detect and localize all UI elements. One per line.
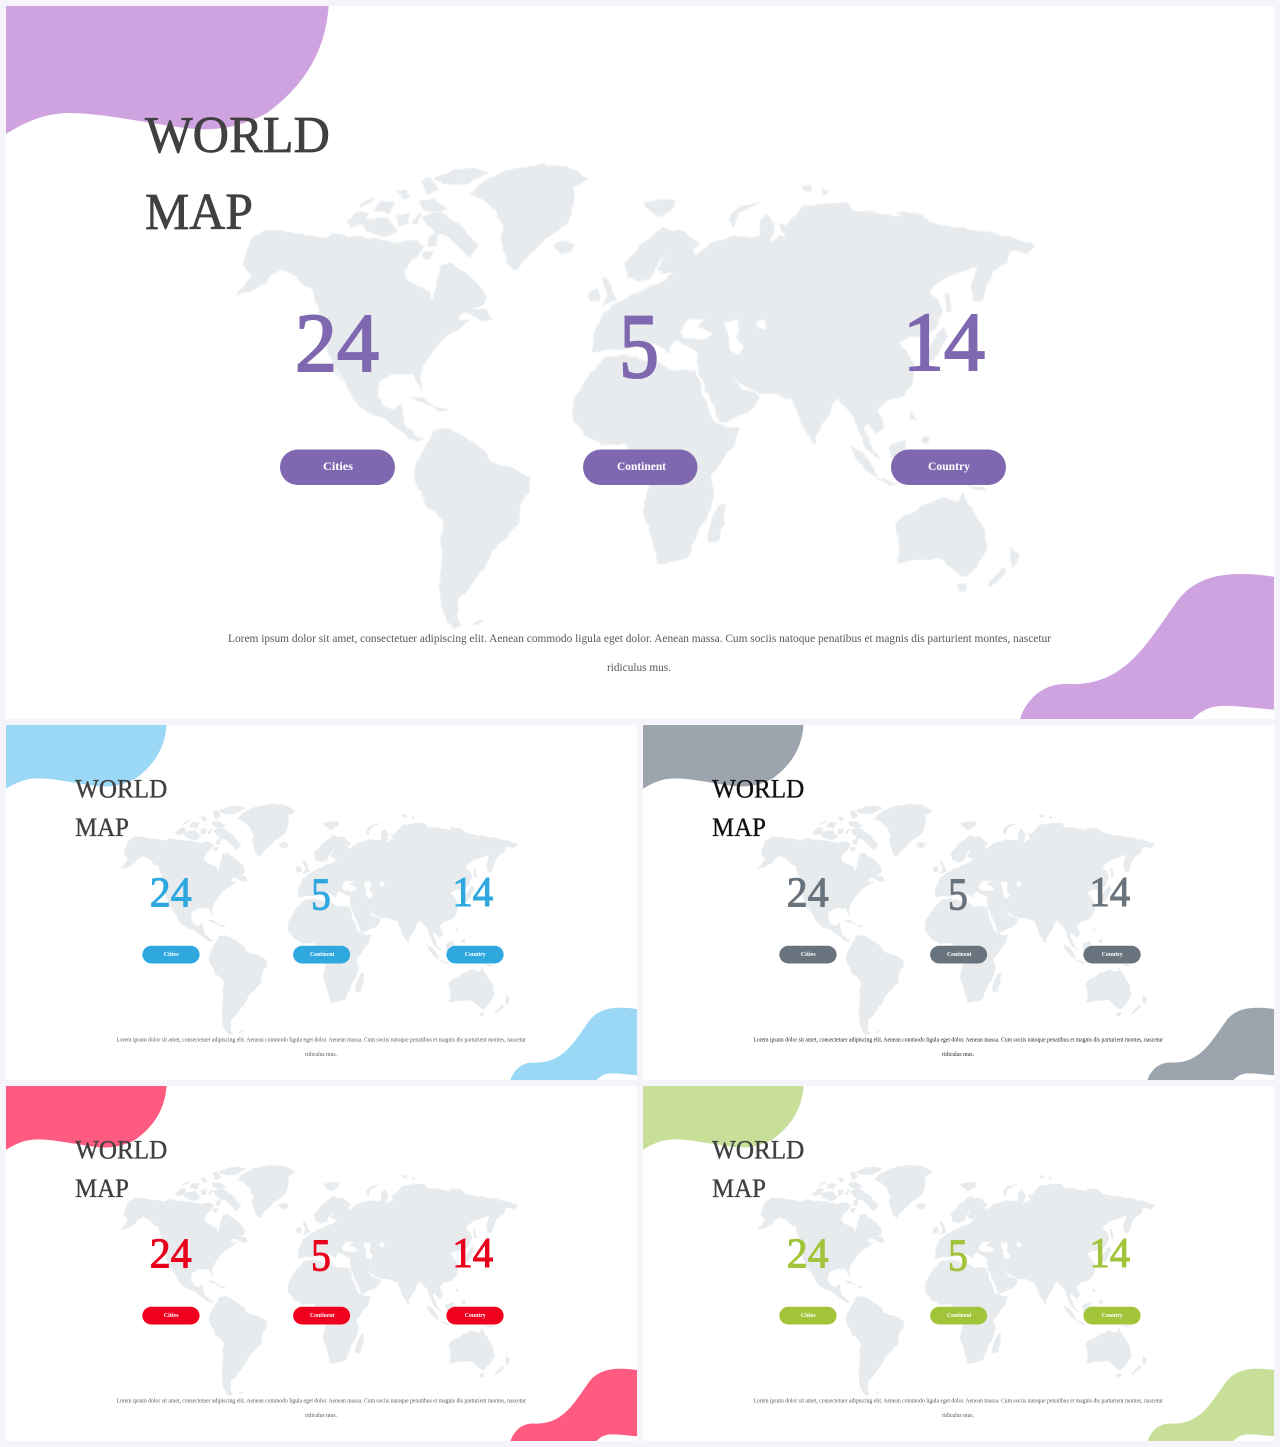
stat: 5 continent [583, 295, 698, 485]
stat: 5 continent: 5 [619, 295, 659, 397]
title: WORLD [145, 107, 330, 164]
world map [121, 1165, 518, 1397]
stat: 5 continent: 5 [311, 869, 331, 920]
title: MAP [712, 1174, 766, 1203]
stat: 24 cities: 24 [150, 871, 192, 917]
body text [228, 633, 1051, 674]
world map [121, 804, 518, 1036]
stat: 5 continent [293, 869, 350, 963]
stat: 24 cities: Cities [323, 459, 353, 473]
stat: 24 cities: Cities [164, 1313, 179, 1319]
title: MAP [75, 1174, 129, 1203]
stat: 24 cities: 24 [295, 297, 379, 390]
blob: top left [3, 1083, 167, 1152]
title [75, 1136, 167, 1203]
blob: top left [640, 1083, 804, 1152]
body text [116, 1399, 526, 1419]
stat: 5 continent: 5 [311, 1230, 331, 1281]
body text: Lorem ipsum dolor sit amet, consectetuer adipiscing elit. Aenean commodo ligula eget dolor. Aenean massa. Cum sociis natoque penatibus et magnis dis parturient montes, nascetur [116, 1038, 526, 1044]
title [75, 775, 167, 842]
stat: 24 cities [280, 297, 395, 485]
panel: blue world map slide [6, 725, 637, 1080]
blob: top left [0, 0, 329, 138]
stat: 5 continent: Continent [947, 1313, 971, 1319]
body text [116, 1038, 526, 1058]
title: WORLD [75, 775, 167, 804]
stat: 14 country [1083, 1231, 1141, 1324]
title: MAP [75, 813, 129, 842]
stat: 5 continent [930, 1230, 987, 1324]
stat: 14 country [446, 870, 504, 963]
blob: bottom right [1147, 1369, 1277, 1444]
body text: ridiculus mus. [607, 662, 671, 674]
title: WORLD [712, 1136, 804, 1165]
stat: 14 country [891, 296, 1006, 485]
stat: 24 cities: 24 [787, 871, 829, 917]
panel: purple world map slide [6, 6, 1274, 719]
body text: Lorem ipsum dolor sit amet, consectetuer adipiscing elit. Aenean commodo ligula eget dolor. Aenean massa. Cum sociis natoque penatibus et magnis dis parturient montes, nascetur [753, 1038, 1163, 1044]
stat: 5 continent: Continent [310, 1313, 334, 1319]
title [712, 1136, 804, 1203]
blob: bottom right [1018, 574, 1280, 725]
stat: 14 country: Country [928, 459, 970, 473]
stat: 14 country: Country [465, 952, 486, 958]
world map [758, 804, 1155, 1036]
stat: 14 country: 14 [452, 870, 493, 916]
stat: 14 country: 14 [452, 1231, 493, 1277]
stat: 24 cities: Cities [164, 952, 179, 958]
title [145, 107, 330, 241]
body text: ridiculus mus. [942, 1052, 974, 1058]
panel: grey world map slide [643, 725, 1274, 1080]
stat: 24 cities: Cities [801, 952, 816, 958]
stat: 5 continent: Continent [310, 952, 334, 958]
blob: top left [640, 722, 804, 791]
body text: ridiculus mus. [942, 1413, 974, 1419]
stat: 14 country [446, 1231, 504, 1324]
stat: 14 country [1083, 870, 1141, 963]
title: WORLD [75, 1136, 167, 1165]
body text: ridiculus mus. [305, 1413, 337, 1419]
blob: bottom right [1147, 1008, 1277, 1083]
stat: 14 country: 14 [903, 296, 985, 389]
stat: 14 country: 14 [1089, 1231, 1130, 1277]
blob: bottom right [510, 1369, 640, 1444]
world map [237, 165, 1035, 630]
title: MAP [712, 813, 766, 842]
title: WORLD [712, 775, 804, 804]
body text [753, 1399, 1163, 1419]
stat: 14 country: Country [1102, 952, 1123, 958]
stat: 24 cities: Cities [801, 1313, 816, 1319]
stat: 24 cities: 24 [787, 1232, 829, 1278]
panel: green world map slide [643, 1086, 1274, 1441]
stat: 24 cities: 24 [150, 1232, 192, 1278]
title: MAP [145, 184, 253, 241]
stat: 5 continent: Continent [617, 459, 666, 473]
stat: 5 continent [930, 869, 987, 963]
stat: 24 cities [142, 1232, 200, 1324]
stat: 24 cities [779, 871, 837, 963]
panel: red world map slide [6, 1086, 637, 1441]
stat: 5 continent: 5 [948, 1230, 968, 1281]
blob: bottom right [510, 1008, 640, 1083]
stat: 24 cities [779, 1232, 837, 1324]
body text [753, 1038, 1163, 1058]
world map [758, 1165, 1155, 1397]
body text: Lorem ipsum dolor sit amet, consectetuer adipiscing elit. Aenean commodo ligula eget dolor. Aenean massa. Cum sociis natoque penatibus et magnis dis parturient montes, nascetur [753, 1399, 1163, 1405]
title [712, 775, 804, 842]
stat: 24 cities [142, 871, 200, 963]
stat: 14 country: 14 [1089, 870, 1130, 916]
stat: 5 continent [293, 1230, 350, 1324]
blob: top left [3, 722, 167, 791]
stat: 14 country: Country [1102, 1313, 1123, 1319]
body text: Lorem ipsum dolor sit amet, consectetuer adipiscing elit. Aenean commodo ligula eget dolor. Aenean massa. Cum sociis natoque penatibus et magnis dis parturient montes, nascetur [228, 633, 1051, 645]
body text: Lorem ipsum dolor sit amet, consectetuer adipiscing elit. Aenean commodo ligula eget dolor. Aenean massa. Cum sociis natoque penatibus et magnis dis parturient montes, nascetur [116, 1399, 526, 1405]
body text: ridiculus mus. [305, 1052, 337, 1058]
stat: 5 continent: 5 [948, 869, 968, 920]
stat: 14 country: Country [465, 1313, 486, 1319]
stat: 5 continent: Continent [947, 952, 971, 958]
